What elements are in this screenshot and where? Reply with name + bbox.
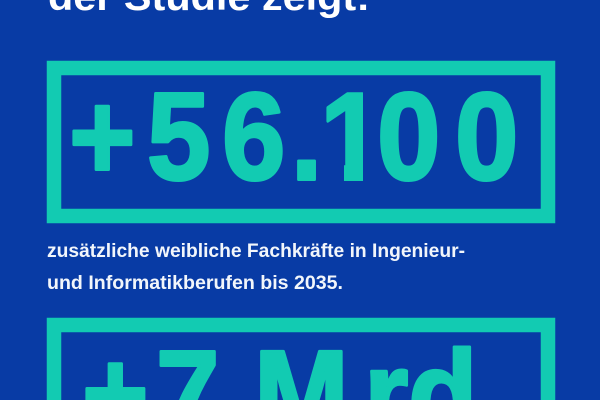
stat value [72,91,516,182]
description text [47,241,465,294]
stat box: +7 Mrd [54,325,548,400]
stat value: +56.1 [69,68,383,207]
box frame [54,68,548,216]
stat box: +56.100 [54,68,548,216]
description text: und Informatikberufen bis 2035. [47,273,343,294]
box frame [54,325,548,400]
stat value: 00 [377,68,518,207]
description text: zusätzliche weibliche Fachkräfte in Ingenieur- [47,241,465,262]
